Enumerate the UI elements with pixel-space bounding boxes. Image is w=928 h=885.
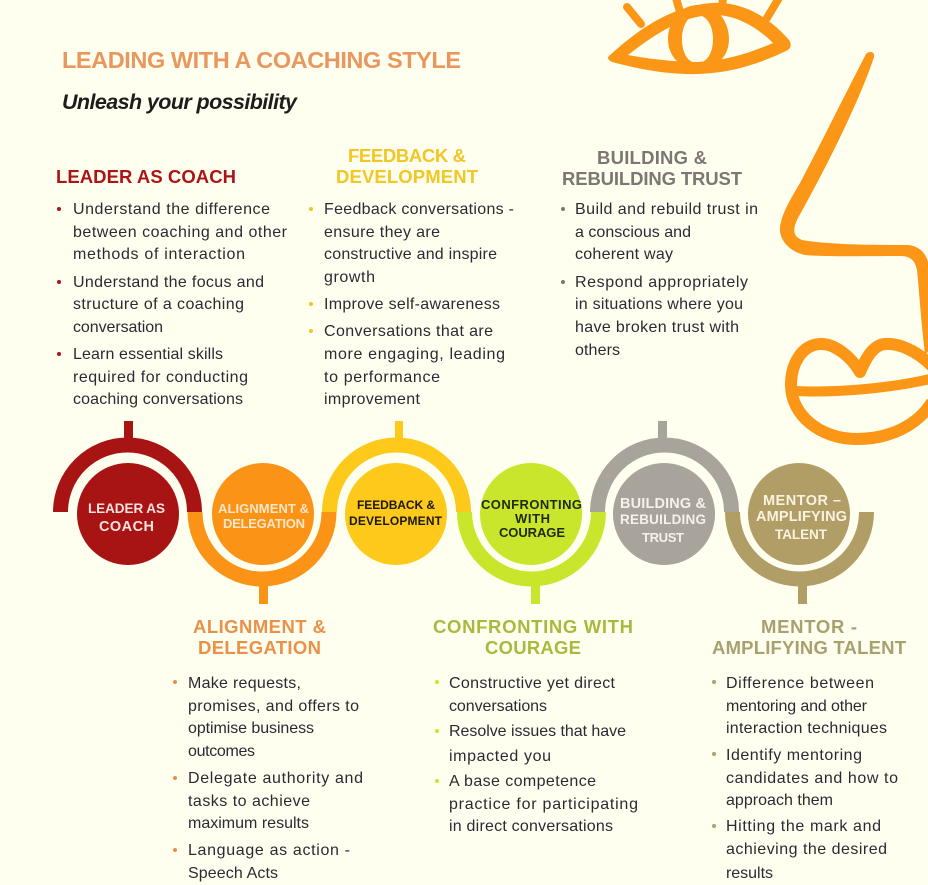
bullet list: others: [575, 342, 620, 359]
heading: [433, 616, 633, 658]
bullet list: ensure they are: [324, 224, 440, 241]
heading: [193, 616, 326, 658]
heading: CONFRONTING WITH: [433, 616, 633, 637]
wave stems and arcs: [60, 421, 866, 604]
bullet list: Resolve issues that have: [449, 723, 626, 740]
icon: face line art: [608, 0, 928, 439]
bullet list: structure of a coaching: [73, 296, 244, 313]
bullet list: Make requests,: [188, 675, 301, 692]
node: leader as coach: LEADER AS: [88, 501, 165, 516]
node: alignment and delegation: [212, 463, 314, 565]
title: LEADING WITH A COACHING STYLE: [62, 47, 461, 73]
bullet list: Understand the difference: [73, 201, 270, 218]
bullet list: Language as action -: [188, 842, 350, 859]
heading: LEADER AS COACH: [56, 166, 236, 187]
panel: leader as coach: [56, 166, 288, 408]
bullet list: Hitting the mark and: [726, 818, 881, 835]
panel: confronting with courage: [433, 616, 638, 835]
bullet list: Difference between: [726, 675, 874, 692]
bullet list: constructive and inspire: [324, 246, 497, 263]
bullet list: [57, 201, 288, 408]
bullet list: conversation: [73, 319, 163, 336]
node: leader as coach: COACH: [99, 519, 154, 535]
heading: MENTOR -: [761, 616, 857, 637]
bullet list: Learn essential skills: [73, 346, 223, 363]
bullet list: practice for participating: [449, 796, 638, 813]
bullet list: coaching conversations: [73, 391, 243, 408]
bullet list: [712, 675, 898, 882]
bullet list: achieving the desired: [726, 841, 887, 858]
bullet list: in situations where you: [575, 296, 743, 313]
bullet list: have broken trust with: [575, 319, 739, 336]
bullet list: Identify mentoring: [726, 747, 862, 764]
heading: FEEDBACK &: [348, 145, 466, 166]
heading: DEVELOPMENT: [336, 166, 479, 187]
heading: AMPLIFYING TALENT: [712, 637, 907, 658]
node: feedback and development: [345, 463, 447, 565]
bullet list: results: [726, 865, 773, 882]
bullet list: Build and rebuild trust in: [575, 201, 758, 218]
bullet list: Feedback conversations -: [324, 201, 514, 218]
bullet list: Speech Acts: [188, 865, 278, 882]
node: feedback and development: FEEDBACK &: [357, 498, 435, 512]
heading: REBUILDING TRUST: [562, 168, 743, 189]
node: alignment and delegation: ALIGNMENT &: [218, 501, 309, 516]
node: mentor amplifying talent: TALENT: [775, 527, 828, 542]
node: confronting with courage: CONFRONTING: [481, 497, 582, 512]
bullet list: [173, 675, 363, 882]
node: building and rebuilding trust: BUILDING &: [620, 496, 707, 512]
bullet list: A base competence: [449, 773, 596, 790]
node: alignment and delegation: DELEGATION: [223, 516, 305, 531]
bullet list: maximum results: [188, 815, 309, 832]
icon: eye: [608, 0, 791, 74]
bullet list: candidates and how to: [726, 770, 898, 787]
bullet list: promises, and offers to: [188, 698, 359, 715]
heading: [562, 147, 743, 189]
node: building and rebuilding trust: TRUST: [642, 530, 684, 545]
bullet list: more engaging, leading: [324, 346, 505, 363]
node: building and rebuilding trust: [613, 463, 715, 565]
bullet list: a conscious and: [575, 224, 691, 241]
heading: DELEGATION: [198, 637, 321, 658]
bullet list: Respond appropriately: [575, 274, 748, 291]
bullet list: [435, 675, 638, 835]
bullet list: interaction techniques: [726, 720, 887, 737]
heading: ALIGNMENT &: [193, 616, 326, 637]
bullet list: to performance: [324, 369, 440, 386]
panel: feedback and development: [309, 145, 514, 408]
bullet list: Conversations that are: [324, 323, 493, 340]
bullet list: [561, 201, 758, 359]
bullet list: required for conducting: [73, 369, 248, 386]
icon: nose: [780, 52, 928, 354]
node: confronting with courage: [480, 463, 582, 565]
heading: [336, 145, 479, 187]
node: building and rebuilding trust: REBUILDING: [620, 512, 706, 527]
diagram: wave of six competencies: [60, 421, 866, 604]
node: mentor amplifying talent: [748, 463, 850, 565]
bullet list: improvement: [324, 391, 421, 408]
bullet list: coherent way: [575, 246, 673, 263]
bullet list: growth: [324, 269, 375, 286]
bullet list: tasks to achieve: [188, 793, 310, 810]
bullet list: optimise business: [188, 720, 314, 737]
bullet list: conversations: [449, 698, 547, 715]
bullet list: approach them: [726, 792, 833, 809]
node: mentor amplifying talent: MENTOR –: [763, 493, 841, 509]
subtitle: Unleash your possibility: [62, 90, 298, 114]
bullet list: methods of interaction: [73, 246, 245, 263]
node: leader as coach: [77, 463, 179, 565]
panel: alignment and delegation: [173, 616, 363, 882]
heading: BUILDING &: [597, 147, 707, 168]
bullet list: between coaching and other: [73, 224, 288, 241]
bullet list: Delegate authority and: [188, 770, 363, 787]
heading: [712, 616, 907, 658]
bullet list: impacted you: [449, 748, 551, 765]
bullet list: mentoring and other: [726, 698, 868, 715]
node: confronting with courage: WITH: [515, 511, 550, 526]
bullet list: Improve self-awareness: [324, 296, 500, 313]
node: feedback and development: DEVELOPMENT: [349, 514, 443, 528]
node: mentor amplifying talent: AMPLIFYING: [756, 509, 847, 525]
heading: COURAGE: [485, 637, 581, 658]
node: confronting with courage: COURAGE: [499, 525, 565, 540]
bullet list: [309, 201, 514, 408]
panel: building and rebuilding trust: [561, 147, 758, 359]
panel: mentor amplifying talent: [712, 616, 907, 882]
bullet list: Constructive yet direct: [449, 675, 616, 692]
icon: lips: [791, 344, 928, 439]
bullet list: outcomes: [188, 743, 255, 760]
bullet list: in direct conversations: [449, 818, 613, 835]
bullet list: Understand the focus and: [73, 274, 264, 291]
